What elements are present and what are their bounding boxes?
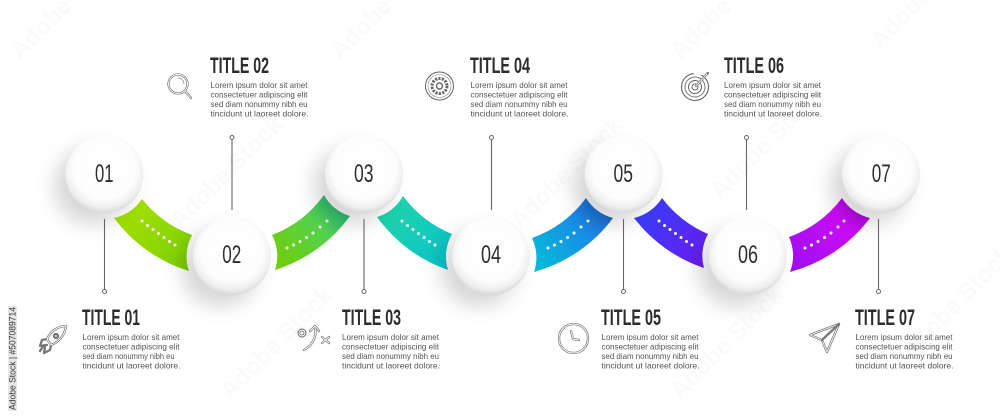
band 6 violet (789, 198, 870, 272)
text block 04: consectetuer adipiscing elit (470, 90, 568, 100)
text block 06: sed diam nonummy nibh eu (724, 99, 821, 109)
text block 03: Lorem ipsum dolor sit amet (342, 332, 440, 342)
text block 05: consectetuer adipiscing elit (602, 342, 699, 352)
faint stock watermark: Adobe Stock (165, 111, 288, 234)
connector 05 (622, 219, 626, 294)
circle 03: 03 (354, 160, 374, 188)
text block 06: TITLE 06 (724, 53, 784, 78)
text block 02: TITLE 02 (210, 53, 269, 78)
text block 05: Lorem ipsum dolor sit amet (602, 332, 699, 342)
circle 01 (55, 135, 144, 224)
connector 07 (876, 219, 880, 294)
faint stock watermark: Adobe Stock (705, 81, 828, 204)
text block 05 (601, 305, 700, 370)
circle 07: 07 (872, 160, 891, 188)
icon: paper plane (810, 324, 839, 352)
text block 03: TITLE 03 (342, 305, 401, 330)
text block 05: TITLE 05 (601, 305, 661, 330)
text block 07: consectetuer adipiscing elit (856, 342, 953, 352)
text block 07: Lorem ipsum dolor sit amet (856, 332, 953, 342)
text block 03 (342, 305, 440, 370)
text block 04: tincidunt ut laoreet dolore. (470, 108, 568, 118)
circle 02 (182, 217, 271, 306)
text block 07: TITLE 07 (855, 305, 915, 330)
text block 03: consectetuer adipiscing elit (342, 342, 440, 352)
text block 02 (210, 53, 308, 118)
circle 07 (831, 135, 920, 224)
circle 06: 06 (738, 241, 758, 269)
text block 04: Lorem ipsum dolor sit amet (470, 80, 568, 90)
connector 04 (490, 136, 494, 210)
text block 07 (855, 305, 954, 370)
circle 04 (441, 217, 530, 306)
text block 05: tincidunt ut laoreet dolore. (602, 360, 700, 370)
text block 04 (470, 53, 568, 118)
text block 06: Lorem ipsum dolor sit amet (724, 80, 822, 90)
icon: clock (559, 324, 588, 353)
circle 04: 04 (481, 241, 501, 269)
circle 05: 05 (614, 160, 633, 188)
band 4 cyan to blue (532, 198, 613, 272)
connector 06 (744, 136, 748, 210)
text block 01: consectetuer adipiscing elit (82, 342, 180, 352)
text block 06: consectetuer adipiscing elit (724, 90, 822, 100)
circle 01: 01 (95, 160, 114, 188)
faint stock watermark: Adobe Stock (215, 281, 338, 404)
text block 01 (82, 305, 180, 370)
band 2 lime to teal (272, 195, 350, 270)
text block 02: tincidunt ut laoreet dolore. (210, 108, 308, 118)
faint stock watermark: Adobe Stock (665, 281, 788, 404)
band 1 green (114, 199, 192, 271)
circle 05 (573, 135, 662, 224)
side stock caption: Adobe Stock | #507089714 (8, 307, 18, 410)
connector 02 (230, 136, 234, 210)
circle 02: 02 (222, 241, 241, 269)
text block 01: TITLE 01 (82, 305, 140, 330)
text block 06: tincidunt ut laoreet dolore. (724, 108, 822, 118)
text block 01: sed diam nonummy nibh eu (82, 351, 175, 361)
faint stock watermark: Adobe Stock (505, 111, 628, 234)
icon: target (682, 73, 708, 100)
text block 06 (724, 53, 822, 118)
text block 01: tincidunt ut laoreet dolore. (82, 360, 180, 370)
connector 01 (102, 219, 106, 294)
text block 02: sed diam nonummy nibh eu (210, 99, 308, 109)
text block 02: Lorem ipsum dolor sit amet (210, 80, 308, 90)
text block 04: TITLE 04 (470, 53, 530, 78)
text block 05: sed diam nonummy nibh eu (602, 351, 699, 361)
text block 03: sed diam nonummy nibh eu (342, 351, 439, 361)
circle 03 (314, 135, 403, 224)
text block 02: consectetuer adipiscing elit (210, 90, 308, 100)
band 3 teal (377, 196, 452, 270)
icon: play strategy (298, 326, 329, 350)
icon: magnifier (168, 74, 191, 98)
text block 07: sed diam nonummy nibh eu (856, 351, 953, 361)
icon: gear cycle (426, 72, 454, 100)
band 5 indigo (634, 198, 708, 268)
text block 07: tincidunt ut laoreet dolore. (856, 360, 954, 370)
icon: rocket (40, 326, 66, 353)
circle 06 (698, 217, 787, 306)
connector 03 (362, 219, 366, 294)
text block 01: Lorem ipsum dolor sit amet (82, 332, 180, 342)
text block 04: sed diam nonummy nibh eu (470, 99, 568, 109)
text block 03: tincidunt ut laoreet dolore. (342, 360, 440, 370)
